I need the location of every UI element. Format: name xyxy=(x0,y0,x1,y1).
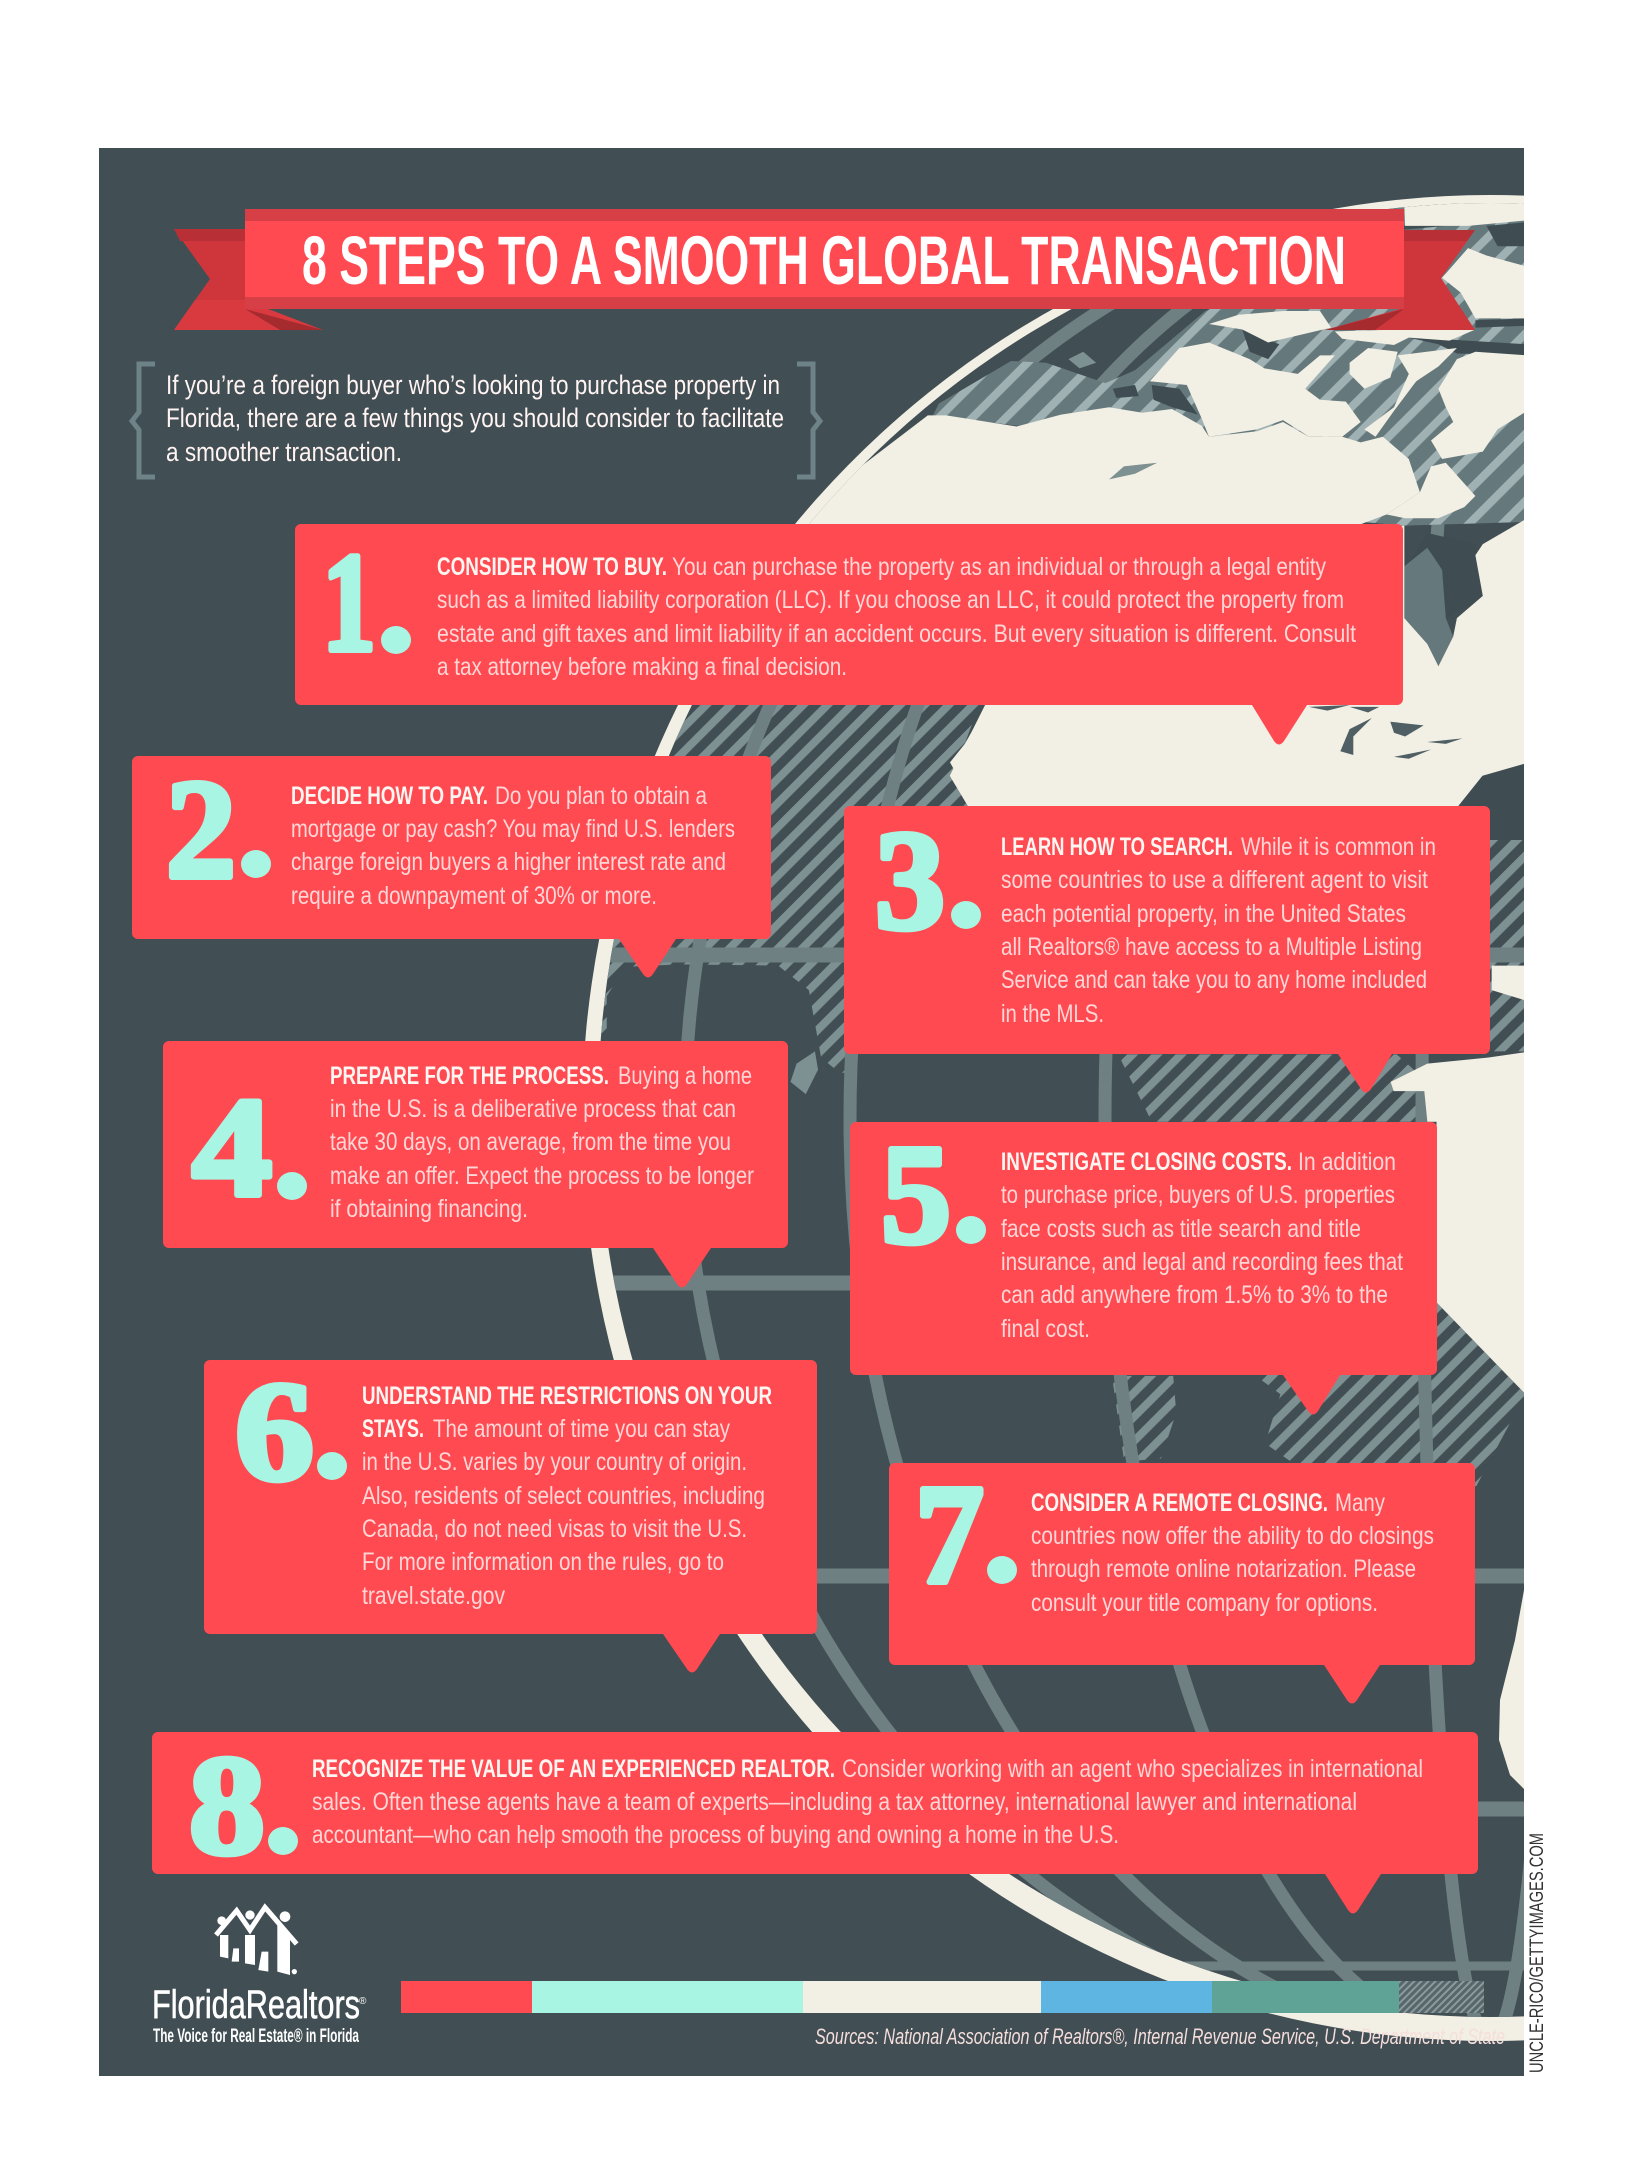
panel: step 2 xyxy=(132,750,771,978)
step 6 text: STAYS. xyxy=(362,1415,424,1443)
step 1 text xyxy=(437,553,1356,681)
step 4 text xyxy=(330,1062,754,1223)
step 2 text: mortgage or pay cash? You may find U.S. lenders xyxy=(291,815,735,843)
intro copy: Florida, there are a few things you should consider to facilitate xyxy=(166,403,784,433)
step 1 text: a tax attorney before making a final decision. xyxy=(437,653,847,681)
step 5 text: to purchase price, buyers of U.S. properties xyxy=(1001,1181,1395,1209)
step 8 text: accountant—who can help smooth the process of buying and owning a home in the U.S. xyxy=(312,1821,1119,1849)
number 2: 2 xyxy=(166,750,236,908)
step 6 text: The amount of time you can stay xyxy=(433,1415,730,1443)
number 5 xyxy=(881,1115,986,1273)
step 5 text: final cost. xyxy=(1001,1315,1090,1343)
logo tagline: The Voice for Real Estate® in Florida xyxy=(153,2026,359,2047)
step 3 text: Service and can take you to any home included xyxy=(1001,966,1427,994)
panel: step 5 xyxy=(850,1115,1437,1414)
step 2 text: require a downpayment of 30% or more. xyxy=(291,882,657,910)
globe illustration xyxy=(585,195,1524,2041)
logo trademark mark: ® xyxy=(359,1996,367,2007)
step 1 text: CONSIDER HOW TO BUY. xyxy=(437,553,667,581)
number 4: 4 xyxy=(192,1068,272,1226)
panel: step 7 xyxy=(889,1455,1475,1704)
step 1 text: You can purchase the property as an individual or through a legal entity xyxy=(672,553,1326,581)
step 2 text xyxy=(291,782,735,910)
number 4 xyxy=(192,1068,307,1226)
panel: step 1 xyxy=(295,523,1403,744)
step 6 text: For more information on the rules, go to xyxy=(362,1548,724,1576)
infographic xyxy=(99,148,1543,2076)
step 3 text: While it is common in xyxy=(1241,833,1436,861)
step 7 text: Many xyxy=(1335,1489,1385,1517)
number 7 xyxy=(915,1455,1017,1613)
step 2 text: charge foreign buyers a higher interest rate and xyxy=(291,848,726,876)
step 8 text xyxy=(312,1755,1423,1849)
panel: step 6 xyxy=(204,1352,817,1672)
step 7 text: CONSIDER A REMOTE CLOSING. xyxy=(1031,1489,1328,1517)
step 8 text: Consider working with an agent who specializes in international xyxy=(842,1755,1423,1783)
step 4 text: PREPARE FOR THE PROCESS. xyxy=(330,1062,609,1090)
step 6 text: UNDERSTAND THE RESTRICTIONS ON YOUR xyxy=(362,1382,772,1410)
number 7: 7 xyxy=(915,1455,984,1613)
number 6: 6 xyxy=(235,1352,314,1510)
panel: step 3 xyxy=(844,801,1490,1092)
panel: step 8 xyxy=(152,1726,1478,1914)
step 6 text: travel.state.gov xyxy=(362,1582,505,1610)
step 6 text: in the U.S. varies by your country of origin. xyxy=(362,1448,747,1476)
step 1 text: such as a limited liability corporation (LLC). If you choose an LLC, it could protect the property from xyxy=(437,586,1344,614)
step 7 text: countries now offer the ability to do closings xyxy=(1031,1522,1434,1550)
step 4 text: if obtaining financing. xyxy=(330,1195,528,1223)
title ribbon xyxy=(174,209,1475,330)
step 4 text: take 30 days, on average, from the time you xyxy=(330,1128,731,1156)
step 7 text: through remote online notarization. Please xyxy=(1031,1555,1416,1583)
number 3: 3 xyxy=(875,801,945,959)
step 2 text: DECIDE HOW TO PAY. xyxy=(291,782,488,810)
left bracket xyxy=(132,364,155,477)
number 3 xyxy=(875,801,981,959)
step 2 text: Do you plan to obtain a xyxy=(495,782,707,810)
step 6 text: Also, residents of select countries, including xyxy=(362,1482,765,1510)
intro copy: a smoother transaction. xyxy=(166,437,402,467)
step 6 text xyxy=(362,1382,772,1610)
logo: Florida Realtors xyxy=(152,1907,367,2047)
step 7 text: consult your title company for options. xyxy=(1031,1589,1378,1617)
step 8 text: sales. Often these agents have a team of experts—including a tax attorney, international lawyer and international xyxy=(312,1788,1357,1816)
number 6 xyxy=(235,1352,347,1510)
icon: people forming houses xyxy=(216,1907,297,1975)
step 3 text: all Realtors® have access to a Multiple Listing xyxy=(1001,933,1422,961)
step 5 text: face costs such as title search and title xyxy=(1001,1215,1361,1243)
number 2 xyxy=(166,750,271,908)
step 3 text: some countries to use a different agent to visit xyxy=(1001,866,1428,894)
step 3 text: LEARN HOW TO SEARCH. xyxy=(1001,833,1233,861)
step 4 text: make an offer. Expect the process to be longer xyxy=(330,1162,754,1190)
step 7 text xyxy=(1031,1489,1434,1617)
number 5: 5 xyxy=(881,1115,951,1273)
intro copy xyxy=(166,370,784,467)
step 5 text: can add anywhere from 1.5% to 3% to the xyxy=(1001,1281,1388,1309)
step 1 text: estate and gift taxes and limit liability if an accident occurs. But every situation is different. Consult xyxy=(437,620,1356,648)
step 6 text: Canada, do not need visas to visit the U.S. xyxy=(362,1515,747,1543)
number 8: 8 xyxy=(189,1726,265,1884)
panel: step 4 xyxy=(163,1041,788,1288)
step 3 text: each potential property, in the United States xyxy=(1001,900,1406,928)
intro text with brackets xyxy=(132,364,820,477)
number 8 xyxy=(189,1726,298,1884)
step 8 text: RECOGNIZE THE VALUE OF AN EXPERIENCED REALTOR. xyxy=(312,1755,835,1783)
logo wordmark: FloridaRealtors xyxy=(152,1983,360,2027)
ribbon tail: right xyxy=(1325,230,1475,330)
right bracket xyxy=(797,364,820,477)
ribbon tail: left xyxy=(174,229,323,330)
step 5 text: insurance, and legal and recording fees that xyxy=(1001,1248,1403,1276)
number 1: 1 xyxy=(322,523,376,681)
background panel xyxy=(99,148,1524,2076)
step 3 text xyxy=(1001,833,1436,1028)
intro copy: If you’re a foreign buyer who’s looking to purchase property in xyxy=(166,370,780,400)
step 5 text xyxy=(1001,1148,1403,1343)
step 3 text: in the MLS. xyxy=(1001,1000,1104,1028)
step 5 text: INVESTIGATE CLOSING COSTS. xyxy=(1001,1148,1292,1176)
photo credit: UNCLE-RICO/GETTYIMAGES.COM xyxy=(1527,1833,1548,2073)
colour bar xyxy=(401,1981,1484,2013)
ribbon band xyxy=(245,209,1404,309)
step 5 text: In addition xyxy=(1298,1148,1396,1176)
step 4 text: Buying a home xyxy=(618,1062,752,1090)
step 4 text: in the U.S. is a deliberative process that can xyxy=(330,1095,736,1123)
